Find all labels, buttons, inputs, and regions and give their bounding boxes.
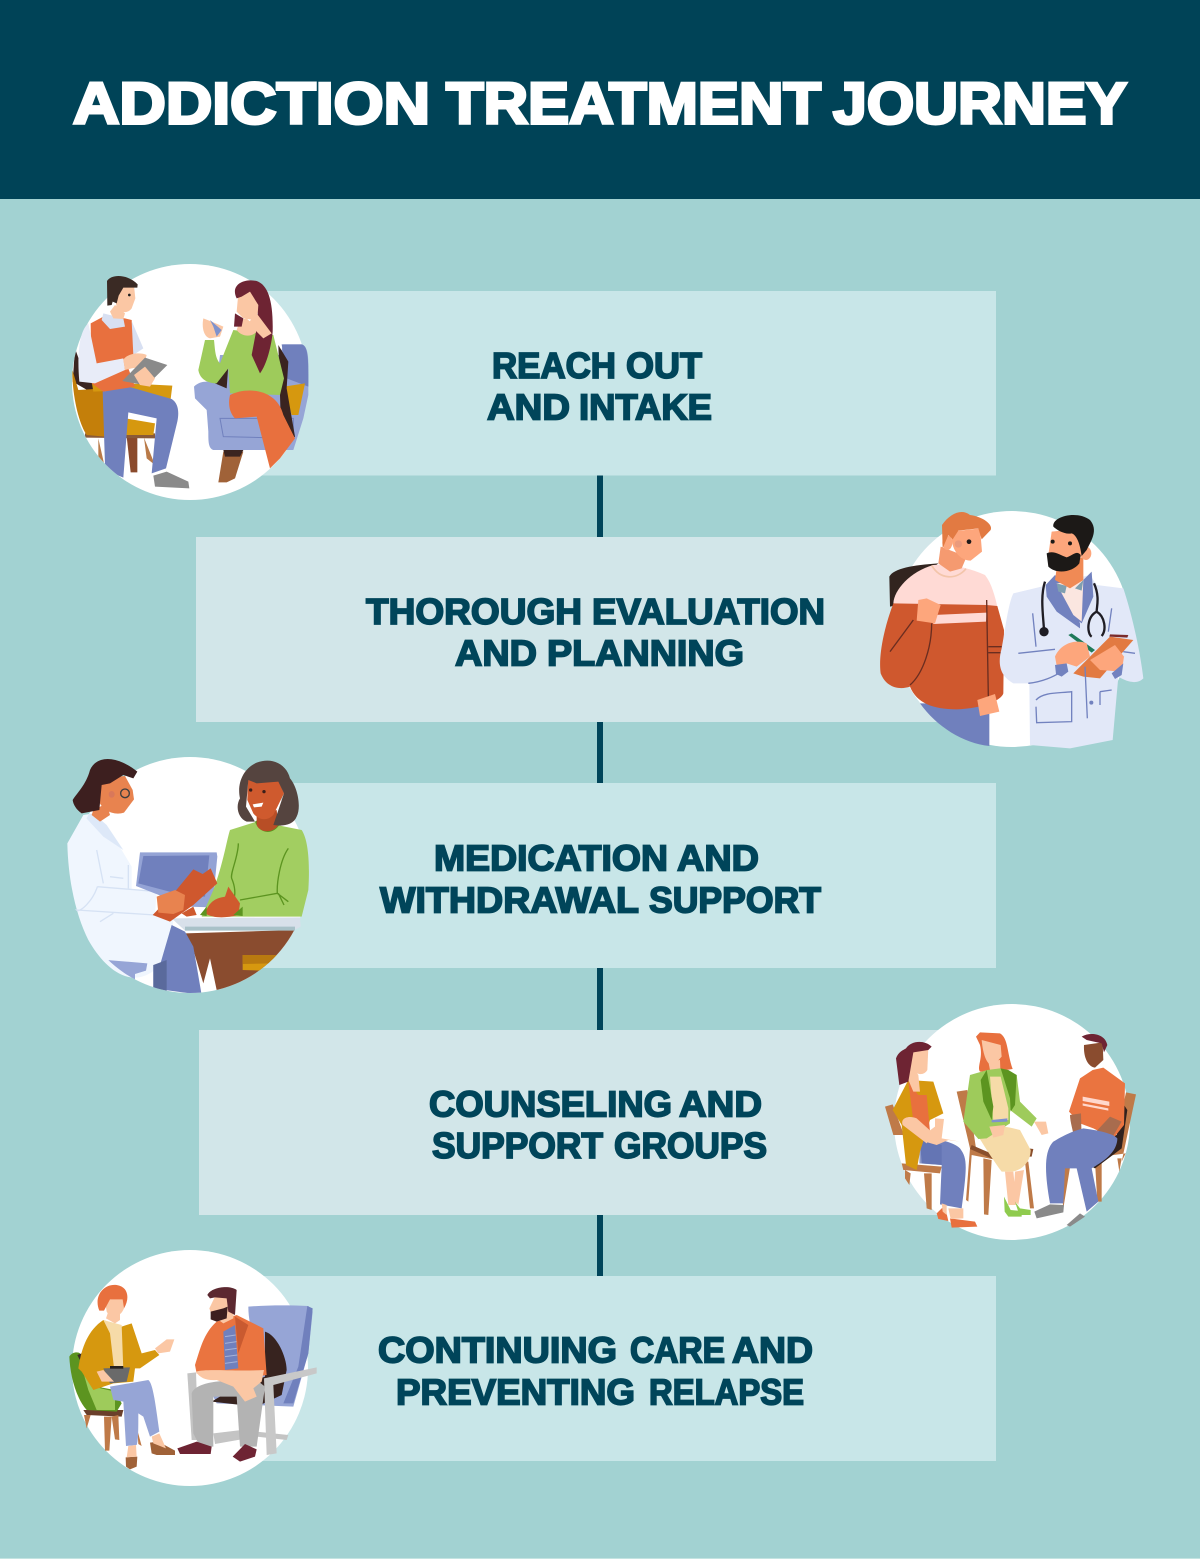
step 5 label — [378, 1330, 813, 1412]
step 1 label: REACH — [492, 345, 616, 386]
icon: counseling group on chairs — [885, 1004, 1136, 1240]
step 5 label: RELAPSE — [649, 1372, 804, 1412]
header band — [0, 0, 1200, 199]
icon: counselor and client in armchairs — [72, 264, 308, 500]
step 2 label: AND — [455, 632, 537, 674]
step 4 label: SUPPORT — [432, 1125, 603, 1166]
step 2 label: THOROUGH — [366, 591, 582, 632]
step 3 label: MEDICATION — [434, 838, 668, 878]
step 3 label: WITHDRAWAL — [380, 880, 639, 920]
step 5 label: CARE — [630, 1330, 725, 1370]
title: ADDICTION — [73, 72, 430, 136]
step 4 label: GROUPS — [614, 1125, 767, 1166]
title: TREATMENT — [446, 72, 821, 136]
step 1 label: OUT — [626, 345, 702, 386]
connector lines between steps — [597, 475, 603, 1276]
step 1 label: INTAKE — [579, 386, 712, 428]
icon: patient with backpack and doctor — [880, 511, 1143, 748]
step 2 label: EVALUATION — [592, 591, 825, 632]
step 1 label: AND — [487, 386, 570, 428]
step 2 label: PLANNING — [547, 632, 744, 674]
step 5 label: CONTINUING — [378, 1330, 617, 1370]
step 3 label: AND — [677, 838, 759, 878]
title: JOURNEY — [833, 72, 1127, 136]
step 4 label: COUNSELING — [429, 1084, 672, 1124]
step 5 label: PREVENTING — [396, 1372, 635, 1412]
step 2 panel — [196, 537, 996, 722]
step 1 panel — [200, 291, 996, 476]
step 1 label — [487, 345, 712, 428]
icon: doctor reviewing file with patient — [67, 757, 309, 995]
step 4 label — [429, 1084, 767, 1166]
icon: counselor and man in lounge chair — [69, 1250, 317, 1486]
step 4 label: AND — [679, 1084, 762, 1124]
step 3 label — [380, 838, 821, 920]
title — [73, 72, 1127, 136]
step 3 panel — [200, 783, 996, 968]
step 2 label — [366, 591, 825, 674]
step 5 label: AND — [732, 1330, 813, 1370]
step 4 panel — [199, 1030, 996, 1215]
step 3 label: SUPPORT — [649, 880, 821, 920]
step 5 panel — [200, 1276, 996, 1461]
